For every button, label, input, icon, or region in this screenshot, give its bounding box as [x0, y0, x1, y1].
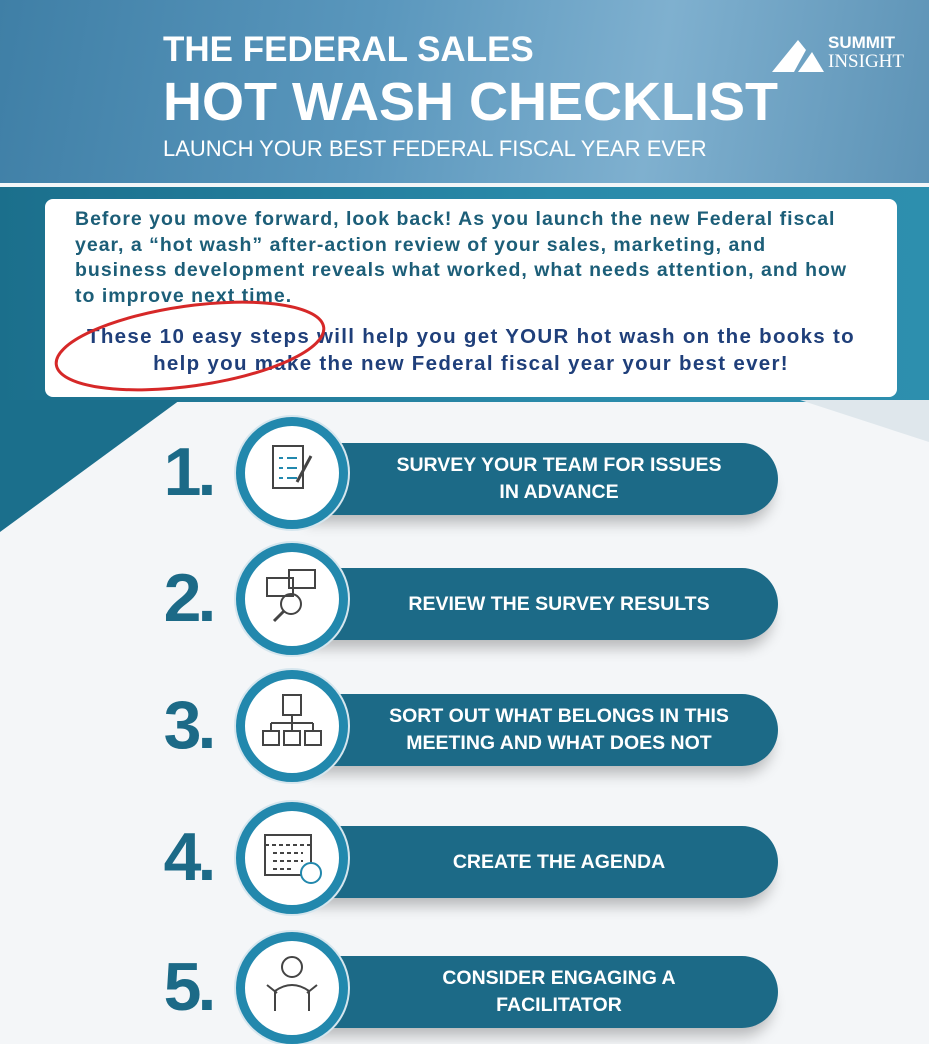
logo — [772, 33, 904, 72]
step 2: REVIEW THE SURVEY RESULTS — [408, 592, 710, 614]
step 2: 2. — [164, 560, 212, 636]
title: HOT WASH CHECKLIST — [163, 72, 778, 132]
intro text: to improve next time. — [75, 284, 292, 306]
logo: INSIGHT — [828, 51, 904, 72]
title — [163, 30, 778, 161]
step 5 — [164, 930, 779, 1044]
title: THE FEDERAL SALES — [163, 30, 534, 69]
teal band — [0, 187, 929, 402]
callout text: help you make the new Federal fiscal year your best ever! — [153, 352, 789, 375]
step 1: 1. — [164, 434, 212, 510]
step 5: 5. — [164, 949, 212, 1025]
step 4: CREATE THE AGENDA — [453, 850, 665, 872]
step 1: IN ADVANCE — [499, 481, 619, 503]
step 4: 4. — [164, 819, 212, 895]
logo: SUMMIT — [828, 33, 895, 52]
step 3: SORT OUT WHAT BELONGS IN THIS — [389, 705, 729, 727]
step 5: CONSIDER ENGAGING A — [442, 967, 676, 989]
step 1 — [164, 415, 779, 531]
title: LAUNCH YOUR BEST FEDERAL FISCAL YEAR EVER — [163, 136, 707, 161]
callout text: These 10 easy steps will help you get YOUR hot wash on the books to — [87, 325, 855, 348]
intro text: year, a “hot wash” after-action review of your sales, marketing, and — [75, 234, 766, 256]
intro text: Before you move forward, look back! As you launch the new Federal fiscal — [75, 208, 835, 230]
callout text — [87, 325, 855, 375]
red circle annotation — [54, 300, 326, 392]
step 3: 3. — [164, 687, 212, 763]
step 5: FACILITATOR — [496, 994, 622, 1016]
step 4 — [164, 800, 779, 916]
intro box — [45, 199, 897, 397]
step 3 — [164, 668, 779, 784]
intro text: business development reveals what worked, what needs attention, and how — [75, 259, 847, 281]
step 2 — [164, 541, 779, 657]
intro text — [75, 208, 847, 306]
step 1: SURVEY YOUR TEAM FOR ISSUES — [396, 454, 722, 476]
step 3: MEETING AND WHAT DOES NOT — [406, 732, 712, 754]
left diagonal teal — [0, 400, 929, 532]
header background — [0, 0, 929, 183]
